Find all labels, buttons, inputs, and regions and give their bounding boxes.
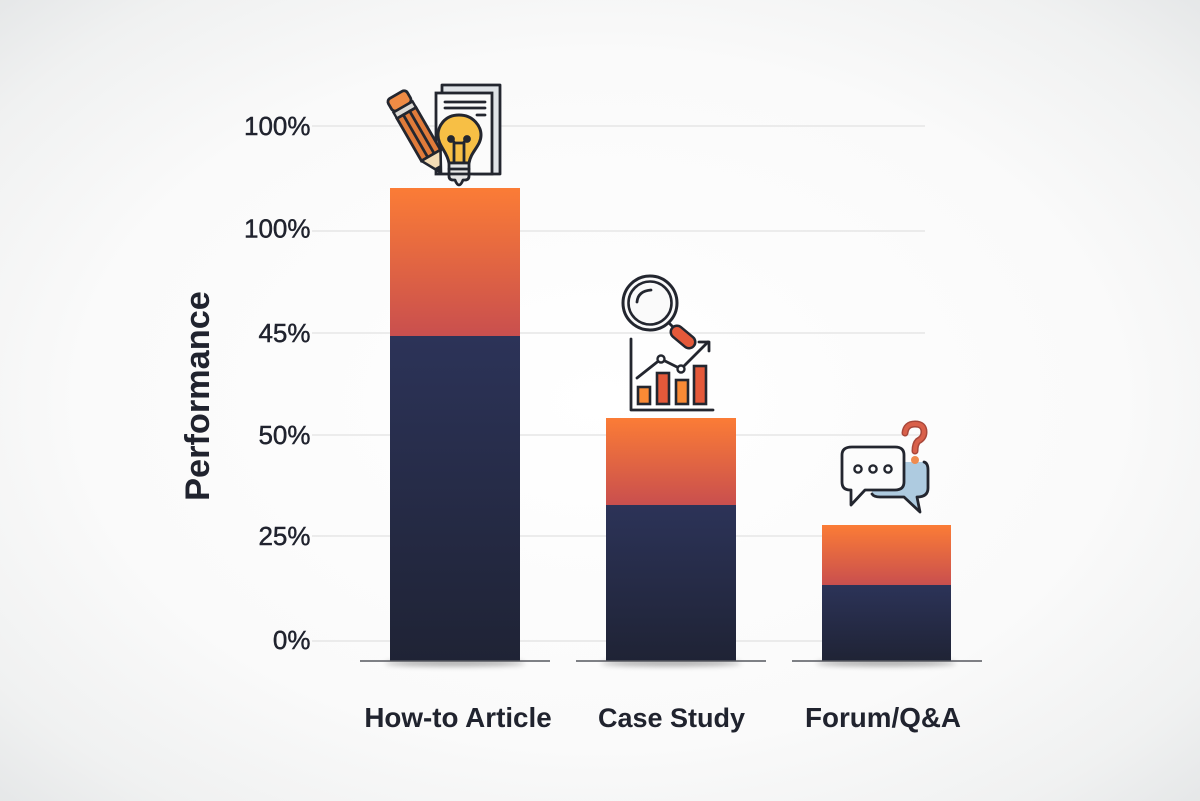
y-axis tick labels: 25% [258, 521, 310, 551]
y-axis tick labels [244, 111, 310, 655]
y-axis tick labels: 100% [244, 214, 310, 244]
bar: Forum/Q&A [792, 525, 982, 666]
bar: Case Study [576, 418, 766, 666]
y-axis tick labels: 100% [244, 111, 310, 141]
icon: chat bubbles with question mark [842, 424, 928, 512]
icon: magnifying glass and growth chart [623, 276, 713, 410]
y-axis title: Performance [179, 291, 217, 501]
y-axis tick labels: 45% [258, 318, 310, 348]
category labels: How-to Article [364, 702, 552, 733]
y-axis tick labels: 0% [273, 625, 310, 655]
bar: How-to Article [360, 188, 550, 666]
y-axis tick labels: 50% [258, 420, 310, 450]
icon: pencil, documents and light bulb [386, 85, 500, 185]
category labels: Forum/Q&A [805, 702, 961, 733]
category labels [364, 702, 961, 733]
category labels: Case Study [598, 703, 745, 733]
